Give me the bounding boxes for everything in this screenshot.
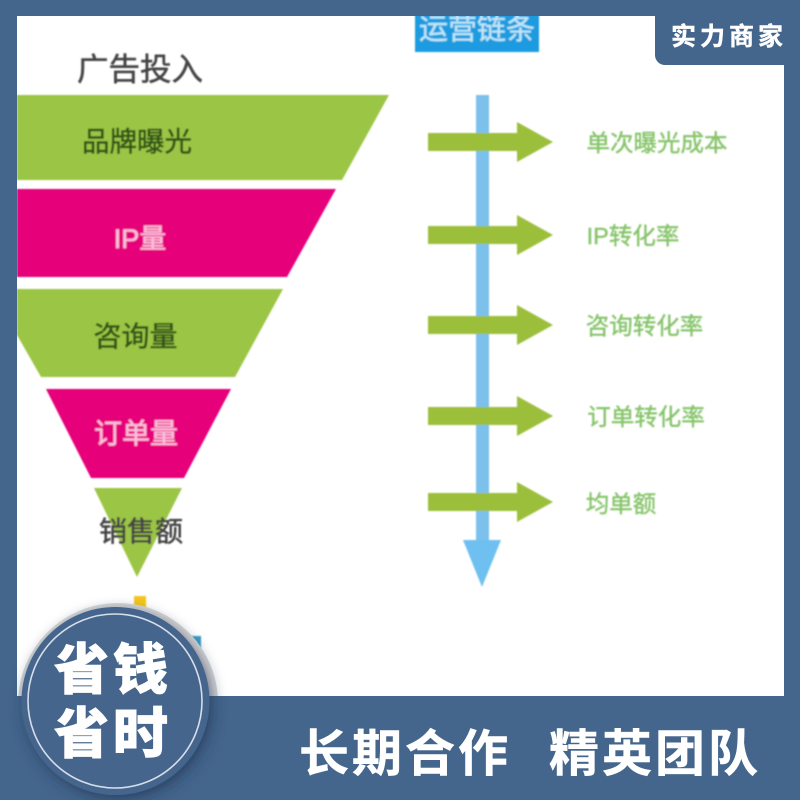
funnel tier: 品牌曝光 — [17, 95, 389, 180]
badge text: 省时: 省时 — [54, 703, 172, 765]
arrow: vertical chain arrow — [463, 95, 501, 587]
tab: 实力商家 — [655, 16, 787, 65]
grey badge ring — [18, 603, 218, 696]
arrow: 咨询转化率 — [428, 305, 553, 345]
tab: 实力商家: 实力商家 — [671, 23, 787, 51]
label: 订单转化率: 订单转化率 — [587, 404, 705, 430]
label: 咨询转化率: 咨询转化率 — [586, 313, 703, 339]
badge text: 省钱: 省钱 — [54, 639, 172, 701]
funnel tier: IP量: IP量 — [114, 224, 166, 254]
label: 均单额: 均单额 — [586, 491, 656, 517]
funnel tier: 销售额 — [94, 488, 183, 577]
yellow fragment — [134, 596, 146, 610]
arrow: 单次曝光成本 — [428, 122, 553, 162]
footer slogan — [299, 726, 761, 782]
heading: 运营链条: 运营链条 — [419, 13, 535, 46]
arrow: 订单转化率 — [428, 396, 553, 436]
funnel tier: 咨询量: 咨询量 — [93, 321, 178, 352]
arrow: 均单额 — [428, 482, 553, 522]
label: 单次曝光成本: 单次曝光成本 — [586, 130, 728, 156]
badge: 省钱省时 — [22, 607, 210, 795]
slogan: 精英团队: 精英团队 — [549, 726, 761, 782]
funnel tier: IP量 — [17, 189, 336, 277]
arrow: IP转化率 — [428, 215, 553, 255]
funnel tier: 咨询量 — [17, 289, 283, 377]
operations chain — [134, 10, 728, 652]
funnel tier: 品牌曝光: 品牌曝光 — [82, 126, 192, 157]
funnel tier: 订单量 — [46, 389, 231, 478]
funnel tier: 订单量: 订单量 — [94, 418, 178, 449]
funnel diagram — [17, 51, 389, 577]
slogan: 长期合作: 长期合作 — [299, 726, 511, 782]
funnel tier: 销售额: 销售额 — [99, 516, 183, 547]
label: IP转化率: IP转化率 — [587, 223, 679, 249]
teal fragment — [192, 634, 202, 648]
heading: 广告投入: 广告投入 — [77, 51, 203, 87]
